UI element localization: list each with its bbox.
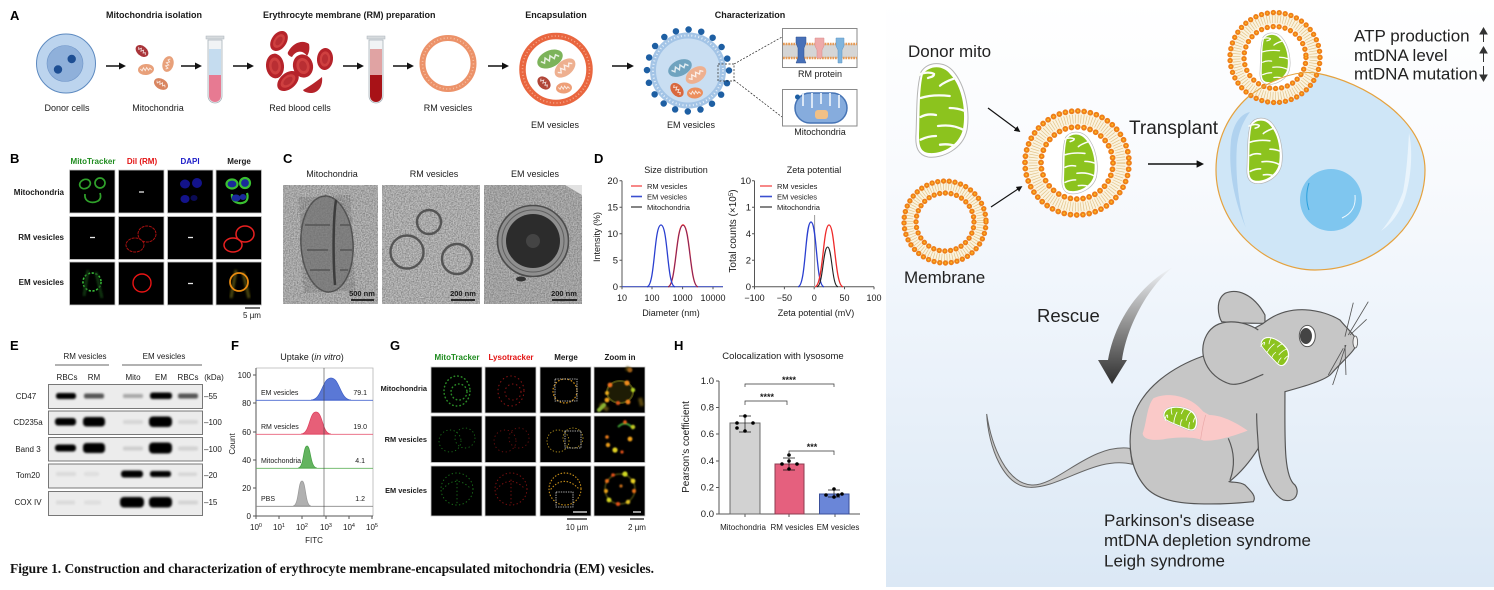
icon: test tube with RBC bbox=[367, 36, 385, 103]
column headers: Lysotracker bbox=[488, 353, 534, 362]
arrow bbox=[343, 65, 362, 67]
column headers: DAPI bbox=[180, 157, 200, 166]
histogram frame and axes: 3 bbox=[329, 523, 332, 529]
column labels bbox=[306, 169, 560, 179]
row labels: Mitochondria bbox=[381, 384, 428, 393]
icon: mitochondrion in cell bbox=[1247, 118, 1282, 184]
lane labels: RBCs bbox=[57, 373, 77, 382]
protein labels: CD235a bbox=[13, 418, 43, 427]
chart: size distribution: 0 bbox=[613, 282, 618, 293]
histogram frame and axes: 20 bbox=[242, 484, 252, 493]
icon: donor cell bbox=[36, 34, 96, 93]
significance brackets: **** bbox=[760, 392, 774, 402]
merge zoom boxes bbox=[555, 379, 581, 507]
lane labels: RM bbox=[88, 373, 101, 382]
molecular weight labels: –100 bbox=[204, 418, 222, 427]
significance brackets: **** bbox=[782, 375, 796, 385]
figure caption: Figure 1. Construction and characterization of erythrocyte membrane-encapsulated mitochondria (EM) vesicles. bbox=[10, 561, 654, 576]
label: RM vesicles: RM vesicles bbox=[424, 103, 473, 113]
TEM image: mitochondria bbox=[283, 185, 378, 304]
chart title: Uptake (in vitro) bbox=[280, 352, 344, 362]
text: outcomes: ATP production bbox=[1354, 26, 1470, 46]
column labels: EM vesicles bbox=[511, 169, 560, 179]
axes: 0.2 bbox=[701, 482, 714, 494]
panel letter F: F bbox=[231, 338, 239, 353]
TEM image: EM vesicles bbox=[484, 185, 582, 304]
heading: characterization: Characterization bbox=[715, 10, 785, 20]
icon: donor mitochondrion bbox=[916, 64, 968, 157]
scale bars: 10 µm bbox=[566, 523, 589, 532]
arrows: up up down bbox=[1480, 28, 1487, 81]
lane labels: EM bbox=[155, 373, 167, 382]
chart: zeta potential: EM vesicles bbox=[777, 192, 817, 202]
chart: size distribution: 5 bbox=[613, 256, 618, 266]
column headers bbox=[71, 157, 251, 166]
TEM image: EM vesicles: 200 nm bbox=[551, 289, 577, 298]
chart: zeta potential: Zeta potential (mV) bbox=[778, 308, 854, 318]
chart: zeta potential: 0 bbox=[746, 282, 751, 293]
histogram frame and axes: 1 bbox=[282, 523, 285, 529]
fluorescence signals bbox=[78, 178, 254, 298]
significance brackets bbox=[745, 375, 834, 455]
lane labels: (kDa) bbox=[204, 373, 224, 382]
group headers: RM vesicles bbox=[63, 352, 107, 361]
axes: 0.0 bbox=[701, 509, 714, 520]
arrow bbox=[181, 65, 200, 67]
histogram frame and axes bbox=[228, 368, 378, 545]
scale bars bbox=[566, 512, 646, 532]
axes: EM vesicles bbox=[817, 523, 859, 532]
molecular weight labels bbox=[204, 392, 222, 507]
axes: 0.8 bbox=[701, 402, 714, 414]
chart: size distribution: 10 bbox=[617, 293, 627, 303]
text: diseases: mtDNA depletion syndrome bbox=[1104, 531, 1311, 550]
illustration: mouse bbox=[987, 292, 1368, 504]
label: red blood cells: Red blood cells bbox=[269, 103, 331, 113]
histogram frame and axes: Count bbox=[228, 433, 237, 455]
group headers: EM vesicles bbox=[143, 352, 185, 361]
TEM image: RM vesicles: 200 nm bbox=[450, 289, 476, 298]
chart: zeta potential: 1 bbox=[746, 202, 751, 214]
zoom indicator box with dashed leader lines bbox=[718, 37, 782, 117]
image grid background bbox=[70, 170, 262, 305]
axes: Mitochondria bbox=[720, 523, 766, 532]
chart: size distribution: Diameter (nm) bbox=[642, 308, 700, 318]
text: outcomes: mtDNA mutation bbox=[1354, 64, 1478, 84]
histogram frame and axes: 5 bbox=[375, 523, 378, 529]
histogram frame and axes: 100 bbox=[238, 371, 252, 380]
label: mitochondria: Mitochondria bbox=[794, 127, 846, 137]
lane labels bbox=[57, 373, 224, 382]
protein labels: CD47 bbox=[16, 392, 37, 401]
zoomed cells bbox=[599, 368, 642, 506]
icon: test tube with mitochondria bbox=[206, 36, 224, 103]
icon: EM vesicle fusing bbox=[1230, 12, 1320, 102]
error bars and data points bbox=[735, 414, 844, 499]
histogram frame and axes: 10 bbox=[343, 523, 352, 532]
lane labels: Mito bbox=[125, 373, 141, 382]
column headers: Dil (RM) bbox=[127, 157, 157, 166]
column labels: RM vesicles bbox=[410, 169, 459, 179]
text: outcomes: mtDNA level bbox=[1354, 46, 1448, 65]
arrow: rescue bbox=[1098, 267, 1173, 384]
icon: nucleus bbox=[1300, 169, 1362, 231]
molecular weight labels: –55 bbox=[204, 392, 218, 401]
chart: zeta potential: ) bbox=[728, 189, 739, 193]
protein labels: COX IV bbox=[14, 498, 42, 507]
column headers: MitoTracker bbox=[435, 353, 479, 362]
panel letter H: H bbox=[674, 338, 683, 353]
column headers: Merge bbox=[554, 353, 578, 362]
histogram frame and axes: 4 bbox=[352, 523, 355, 529]
icon: recipient cell bbox=[1216, 72, 1425, 270]
chart: zeta potential bbox=[728, 165, 882, 318]
chart: zeta potential: Total counts (×10 bbox=[728, 196, 739, 273]
chart: size distribution: 10000 bbox=[700, 293, 726, 303]
row labels: RM vesicles bbox=[18, 233, 65, 242]
histogram frame and axes: 0 bbox=[259, 523, 262, 529]
icon: EM vesicle with mitochondria bbox=[522, 36, 590, 103]
arrow: mito to vesicle bbox=[988, 108, 1019, 131]
label: donor mito: Donor mito bbox=[908, 42, 991, 61]
text: diseases bbox=[1104, 511, 1311, 570]
arrow bbox=[612, 65, 632, 67]
axes bbox=[681, 376, 860, 532]
chart: size distribution: 100 bbox=[644, 293, 660, 303]
histogram frame and axes: 10 bbox=[296, 523, 305, 532]
column headers: MitoTracker bbox=[71, 157, 115, 166]
histogram frame and axes: 80 bbox=[242, 399, 252, 408]
column headers: Zoom in bbox=[604, 353, 636, 362]
row labels: Mitochondria bbox=[14, 188, 65, 197]
white gaps markers bbox=[90, 192, 193, 284]
histogram labels: PBS bbox=[261, 496, 275, 503]
panel letter A: A bbox=[10, 8, 20, 23]
icon: red blood cells bbox=[265, 28, 334, 95]
chart: zeta potential: 5 bbox=[729, 192, 735, 196]
icon: membrane vesicle bbox=[904, 181, 986, 263]
chart: size distribution: 20 bbox=[607, 176, 618, 187]
chart: zeta potential: 2 bbox=[746, 256, 751, 266]
axes: 0.4 bbox=[701, 456, 714, 467]
row labels: RM vesicles bbox=[385, 435, 427, 444]
chart: size distribution bbox=[592, 165, 726, 318]
panel E: western blots bbox=[10, 338, 224, 516]
histogram frame and axes: 60 bbox=[242, 428, 252, 437]
label: EM vesicles: EM vesicles bbox=[667, 120, 716, 130]
row labels bbox=[381, 384, 428, 495]
text: outcomes bbox=[1354, 26, 1478, 84]
panel letter B: B bbox=[10, 151, 19, 166]
blot frames bbox=[48, 384, 202, 516]
histogram labels: Mitochondria bbox=[261, 458, 301, 465]
molecular weight labels: –15 bbox=[204, 498, 218, 507]
label: donor cells: Donor cells bbox=[44, 103, 90, 113]
icon: EM vesicle centre bbox=[1025, 111, 1129, 215]
lane labels: RBCs bbox=[178, 373, 198, 382]
chart: zeta potential: Zeta potential bbox=[787, 165, 841, 175]
icon: mitochondria bbox=[133, 43, 175, 92]
column headers bbox=[435, 353, 636, 362]
histogram frame and axes: 0 bbox=[247, 512, 252, 521]
arrow: membrane to vesicle bbox=[991, 187, 1021, 207]
chart: zeta potential: 50 bbox=[839, 293, 850, 303]
histogram frame and axes: 2 bbox=[305, 523, 308, 529]
chart: zeta potential: 100 bbox=[866, 293, 882, 303]
protein labels: Tom20 bbox=[16, 471, 41, 480]
panel letter C: C bbox=[283, 151, 293, 166]
panel letter D: D bbox=[594, 151, 603, 166]
arrow: transplant bbox=[1148, 163, 1202, 165]
icon: EM vesicle with surface proteins bbox=[647, 30, 729, 112]
axes: 0.6 bbox=[701, 429, 714, 440]
panel G: lysotracker images bbox=[381, 338, 646, 532]
significance brackets: *** bbox=[807, 442, 818, 452]
panel D: particle charts bbox=[592, 151, 882, 318]
chart: zeta potential: RM vesicles bbox=[777, 182, 818, 191]
arrow bbox=[233, 65, 252, 67]
axes: RM vesicles bbox=[770, 523, 814, 532]
histogram labels: RM vesicles bbox=[261, 424, 299, 431]
chart: size distribution: 1000 bbox=[673, 293, 693, 303]
panel A: workflow schematic bbox=[10, 8, 857, 137]
heading: RM preparation: Erythrocyte membrane (RM) preparation bbox=[263, 10, 436, 20]
histogram labels: 79.1 bbox=[353, 390, 367, 397]
histogram frame and axes: 10 bbox=[273, 523, 282, 532]
bar: EM vesicles bbox=[820, 494, 849, 514]
chart: size distribution: Intensity (%) bbox=[592, 212, 602, 262]
inset: RM protein bbox=[782, 28, 857, 68]
chart: size distribution: Mitochondria bbox=[647, 203, 691, 212]
inset: mitochondria bbox=[782, 90, 857, 126]
row labels bbox=[14, 188, 65, 287]
histogram labels: 4.1 bbox=[355, 458, 365, 465]
histogram frame and axes: FITC bbox=[305, 536, 323, 545]
blot bands bbox=[55, 392, 198, 508]
chart: zeta potential: 4 bbox=[746, 229, 751, 240]
axes: Pearson's coefficient bbox=[681, 401, 692, 493]
icon: RM vesicle bbox=[422, 38, 474, 89]
chart: zeta potential: 10 bbox=[740, 176, 751, 187]
panel background bbox=[886, 0, 1494, 587]
histogram frame and axes: 10 bbox=[250, 523, 259, 532]
image grid background bbox=[431, 367, 645, 516]
scale bar 5 um: 5 µm bbox=[243, 311, 261, 320]
molecular weight labels: –100 bbox=[204, 445, 222, 454]
label: rescue: Rescue bbox=[1037, 305, 1100, 326]
group headers bbox=[55, 352, 202, 365]
axes: 1.0 bbox=[701, 376, 714, 387]
panel letter G: G bbox=[390, 338, 400, 353]
chart: size distribution: Size distribution bbox=[644, 165, 708, 175]
chart title: Colocalization with lysosome bbox=[722, 351, 844, 362]
label: membrane: Membrane bbox=[904, 268, 985, 287]
text: diseases: Parkinson's disease bbox=[1104, 511, 1255, 530]
chart: zeta potential: −50 bbox=[777, 293, 792, 303]
row labels: EM vesicles bbox=[19, 278, 65, 287]
chart: zeta potential: −100 bbox=[744, 293, 765, 303]
histogram frame and axes: 10 bbox=[366, 523, 375, 532]
label: EM vesicles: EM vesicles bbox=[531, 120, 580, 130]
right panel: graphical abstract bbox=[886, 0, 1494, 587]
chart: size distribution: RM vesicles bbox=[647, 182, 688, 191]
label: transplant: Transplant bbox=[1129, 118, 1219, 139]
arrow bbox=[393, 65, 412, 67]
histogram labels bbox=[261, 390, 367, 503]
histogram frame and axes: 40 bbox=[242, 456, 252, 465]
column headers: Merge bbox=[227, 157, 251, 166]
molecular weight labels: –20 bbox=[204, 471, 218, 480]
histogram frame and axes: 10 bbox=[320, 523, 329, 532]
column labels: Mitochondria bbox=[306, 169, 358, 179]
histogram curves bbox=[256, 368, 373, 516]
row labels: EM vesicles bbox=[385, 486, 427, 495]
bar: RM vesicles bbox=[775, 464, 804, 514]
label: mitochondria: Mitochondria bbox=[132, 103, 184, 113]
TEM image: RM vesicles bbox=[382, 185, 480, 304]
TEM image: mitochondria: 500 nm bbox=[349, 289, 375, 298]
protein labels: Band 3 bbox=[15, 445, 41, 454]
bar: mitochondria bbox=[730, 423, 760, 514]
panel C: TEM images bbox=[283, 151, 582, 304]
text: diseases: Leigh syndrome bbox=[1104, 552, 1225, 570]
heading: encapsulation: Encapsulation bbox=[525, 10, 587, 20]
heading: mitochondria isolation: Mitochondria isolation bbox=[106, 10, 202, 20]
panel letter E: E bbox=[10, 338, 19, 353]
chart: size distribution: 10 bbox=[607, 229, 618, 240]
arrow bbox=[488, 65, 507, 67]
protein labels bbox=[13, 392, 43, 507]
panel H: bar chart bbox=[674, 338, 860, 532]
chart: size distribution: 15 bbox=[607, 202, 618, 214]
chart: zeta potential: Mitochondria bbox=[777, 203, 821, 212]
histogram labels: 1.2 bbox=[355, 496, 365, 503]
histogram labels: 19.0 bbox=[353, 424, 367, 431]
arrow bbox=[106, 65, 124, 67]
label: RM protein: RM protein bbox=[798, 69, 842, 79]
chart: size distribution: EM vesicles bbox=[647, 192, 687, 202]
panel F: flow cytometry histogram bbox=[228, 338, 378, 545]
panel B: confocal images bbox=[10, 151, 262, 320]
fluorescence puncta bbox=[439, 376, 583, 505]
histogram labels: EM vesicles bbox=[261, 390, 299, 397]
chart: zeta potential: 0 bbox=[812, 293, 817, 303]
scale bars: 2 µm bbox=[628, 523, 646, 532]
